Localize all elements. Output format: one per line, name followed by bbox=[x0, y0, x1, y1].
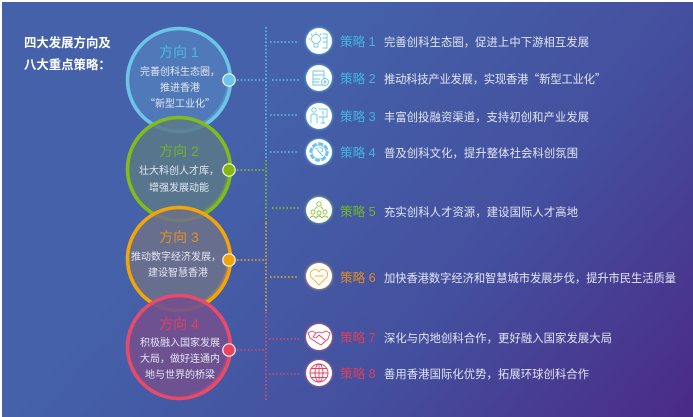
strategy 3: 丰富创投融资渠道，支持初创和产业发展 bbox=[384, 110, 589, 124]
strategy 7: 策略 7 bbox=[340, 330, 376, 345]
circle: direction 1: “新型工业化” bbox=[145, 95, 215, 110]
icon: person and board bbox=[305, 102, 333, 130]
circle: direction 1: 方向 1 bbox=[159, 44, 199, 60]
strategy 6: 加快香港数字经济和智慧城市发展步伐，提升市民生活质量 bbox=[384, 271, 676, 285]
strategy 4 bbox=[305, 138, 578, 166]
circle: direction 2 bbox=[128, 118, 235, 220]
circle: direction 4 bbox=[128, 296, 235, 398]
strategy 7 bbox=[305, 323, 612, 351]
strategy 7: 深化与内地创科合作，更好融入国家发展大局 bbox=[384, 331, 612, 345]
icon: heart bbox=[305, 262, 333, 290]
strategy 1: 完善创科生态圈，促进上中下游相互发展 bbox=[384, 35, 589, 49]
strategy 5: 策略 5 bbox=[340, 204, 376, 219]
circle: direction 2: 壮大科创人才库， bbox=[139, 164, 219, 177]
strategy 4: 策略 4 bbox=[340, 145, 376, 160]
icon: light bulb bbox=[305, 27, 333, 55]
strategy 8: 善用香港国际化优势，拓展环球创科合作 bbox=[384, 367, 589, 381]
strategy 2 bbox=[305, 64, 606, 92]
strategy 3 bbox=[305, 102, 589, 130]
circle: direction 3: 推动数字经济发展， bbox=[131, 250, 221, 263]
icon: handshake bbox=[305, 323, 333, 351]
strategy 4: 普及创科文化，提升整体社会科创氛围 bbox=[384, 146, 578, 160]
circle: direction 3 bbox=[128, 208, 235, 310]
icon: globe bbox=[305, 359, 333, 387]
strategy 5: 充实创科人才资源，建设国际人才高地 bbox=[384, 205, 578, 219]
circle: direction 4: 积极融入国家发展 bbox=[140, 336, 220, 349]
circle: direction 2: 增强发展动能 bbox=[149, 181, 209, 194]
strategy 8: 策略 8 bbox=[340, 366, 376, 381]
circle: direction 3: 方向 3 bbox=[159, 229, 199, 245]
circle: direction 1: 推进香港 bbox=[160, 81, 200, 94]
circle: direction 4: 大局，做好连通内 bbox=[140, 352, 220, 365]
strategy 6: 策略 6 bbox=[340, 270, 376, 285]
strategy 8 bbox=[305, 359, 589, 387]
strategy 1 bbox=[305, 27, 589, 55]
icon: panel and gear bbox=[305, 64, 333, 92]
circle: direction 1: 完善创科生态圈， bbox=[140, 65, 220, 78]
strategy 3: 策略 3 bbox=[340, 109, 376, 124]
icon: people network bbox=[305, 196, 333, 224]
circle: direction 1 bbox=[128, 28, 235, 132]
circle: direction 2: 方向 2 bbox=[159, 143, 199, 159]
strategy 6 bbox=[305, 262, 676, 290]
circle: direction 3: 建设智慧香港 bbox=[148, 266, 208, 279]
strategy 2: 策略 2 bbox=[340, 71, 376, 86]
title: 四大发展方向及 bbox=[24, 35, 111, 50]
circle: direction 4: 方向 4 bbox=[159, 316, 199, 332]
title bbox=[24, 35, 111, 72]
circle: direction 4: 地与世界的桥梁 bbox=[145, 368, 215, 381]
icon: gear and wrench bbox=[305, 138, 333, 166]
dotted connector lines bbox=[237, 27, 301, 400]
strategy 1: 策略 1 bbox=[340, 34, 376, 49]
title: 八大重点策略： bbox=[24, 57, 111, 72]
strategy 2: 推动科技产业发展，实现香港“新型工业化” bbox=[384, 71, 606, 87]
strategy 5 bbox=[305, 196, 578, 224]
